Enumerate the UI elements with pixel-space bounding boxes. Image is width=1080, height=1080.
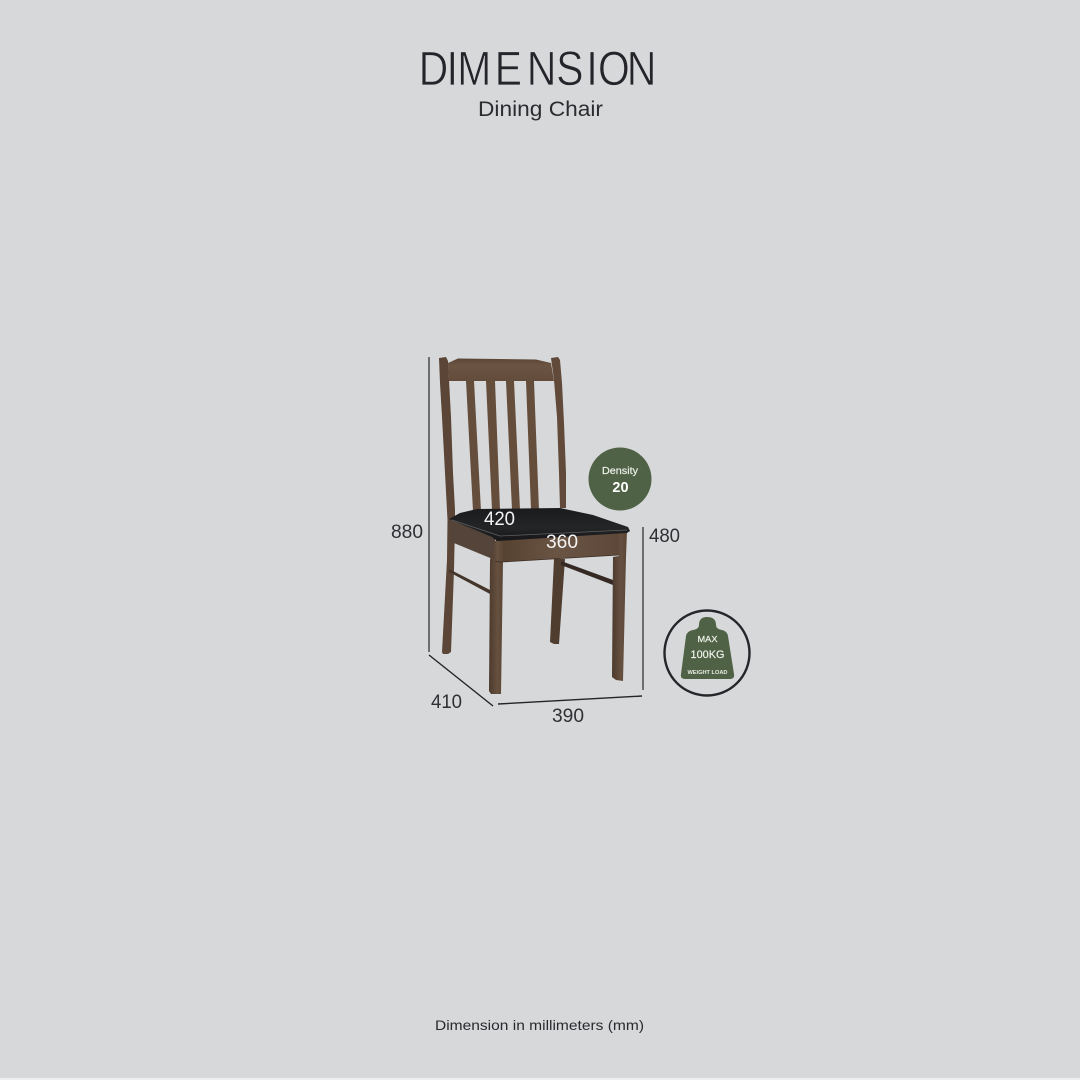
top rail	[448, 358, 554, 381]
title: DIMENSION	[419, 43, 656, 96]
front seat apron	[495, 530, 619, 562]
right stretcher	[561, 561, 613, 585]
density badge	[588, 448, 652, 510]
dimension line: seat height 480	[642, 527, 644, 690]
icon: weight	[681, 617, 734, 679]
label 410: 410	[431, 692, 462, 713]
weight load badge: WEIGHT LOAD	[688, 670, 728, 676]
weight load badge: 100KG	[690, 649, 724, 661]
weight load badge	[664, 610, 750, 696]
weight load badge: MAX	[698, 635, 718, 644]
rear right post	[551, 357, 566, 508]
apron shadow	[495, 555, 619, 562]
front left leg	[489, 541, 503, 694]
footnote: Dimension in millimeters (mm)	[435, 1017, 644, 1033]
label 420: 420	[484, 509, 515, 530]
subtitle: Dining Chair	[478, 98, 603, 121]
back slats	[466, 381, 539, 511]
rear right leg	[550, 559, 565, 644]
dimension line: depth 410	[429, 655, 493, 706]
seat cushion	[449, 508, 630, 541]
density badge: Density	[602, 466, 638, 477]
dimension line: width 390	[498, 696, 642, 704]
density badge: 20	[612, 480, 629, 496]
label 480: 480	[649, 526, 680, 547]
rear left post and leg	[439, 357, 455, 654]
front right leg	[612, 531, 627, 681]
seat highlight	[452, 520, 627, 536]
label 360: 360	[546, 532, 578, 553]
left seat apron	[449, 519, 495, 560]
dimension line: height 880	[428, 357, 430, 652]
left stretcher	[449, 569, 490, 594]
label 880: 880	[391, 522, 423, 543]
chair illustration	[439, 357, 630, 694]
label 390: 390	[552, 706, 584, 727]
